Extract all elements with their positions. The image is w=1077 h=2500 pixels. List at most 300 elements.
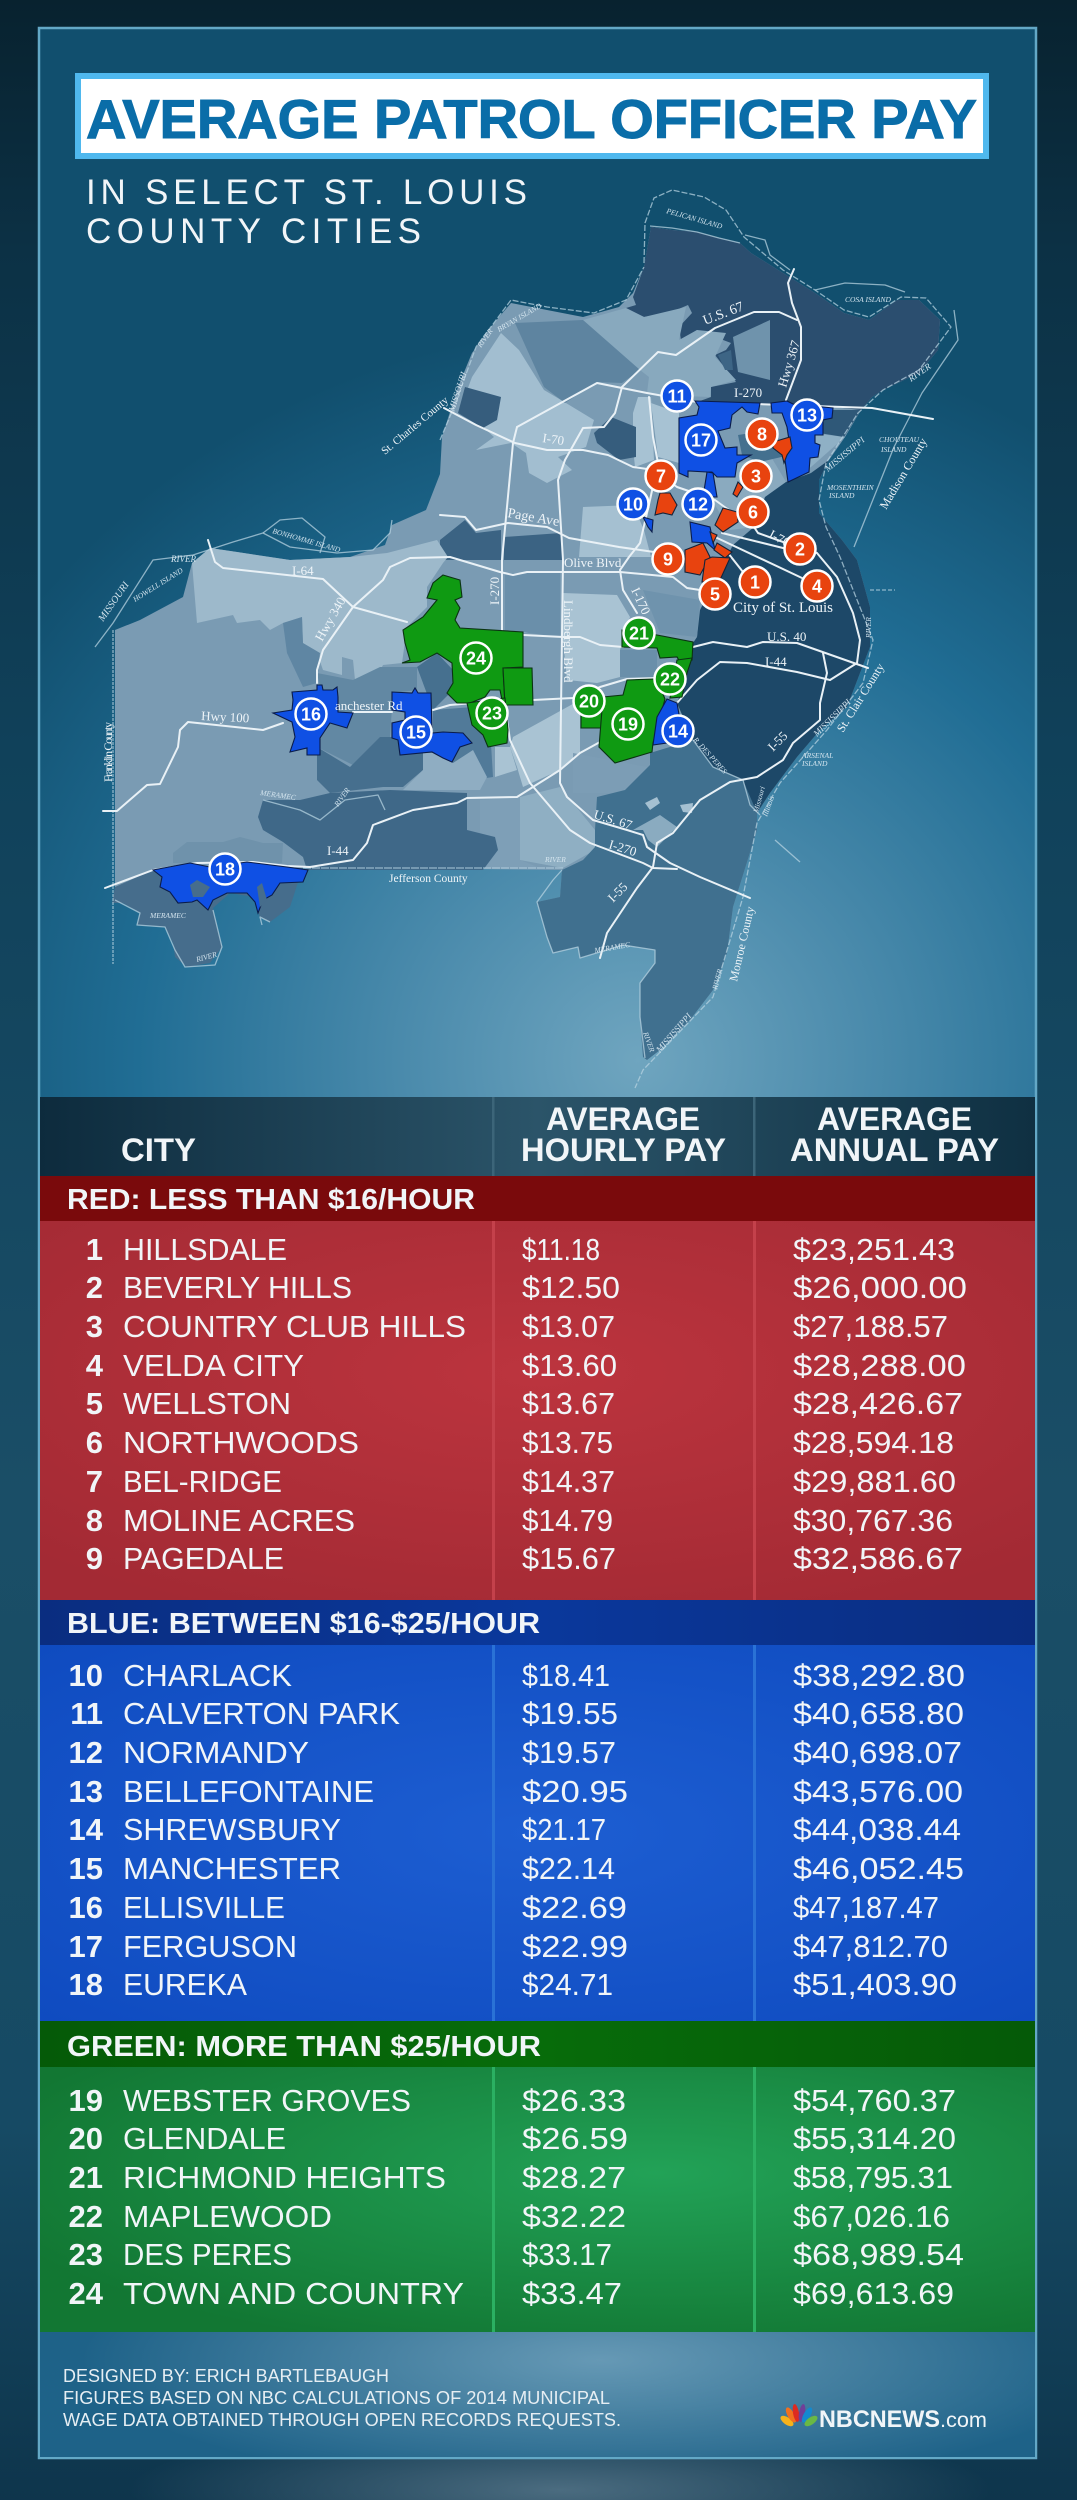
- shade: dark block central: [594, 417, 636, 460]
- shade: northwest light wedge: [461, 333, 594, 483]
- map labels: RIVER: [641, 1030, 657, 1054]
- credits text: FIGURES BASED ON NBC CALCULATIONS OF 2014 MUNICIPAL: [63, 2388, 610, 2408]
- table header row: [40, 1097, 1035, 1176]
- pin: 1: 1: [750, 572, 760, 592]
- map labels: Madison County: [877, 435, 930, 512]
- city: small red area: [710, 532, 717, 543]
- shade: medium block 3: [643, 590, 700, 637]
- pin: 18: 18: [215, 860, 235, 880]
- row 1: [86, 1232, 955, 1267]
- pin: 7: [646, 460, 676, 492]
- shade: west light: [192, 540, 448, 680]
- shade: west darker notch: [283, 617, 320, 687]
- row 4: $28,288.00: [793, 1348, 966, 1383]
- map labels: Hwy 340: [312, 594, 349, 644]
- icon: peacock: [779, 2404, 819, 2428]
- NBC News logo: .com: [940, 2409, 987, 2432]
- shade: city of St. Louis: [677, 460, 870, 813]
- row 7: $14.37: [522, 1464, 615, 1499]
- row 8: MOLINE ACRES: [123, 1503, 355, 1538]
- row 6: [86, 1425, 954, 1460]
- row 11: $40,658.80: [793, 1696, 964, 1731]
- shade: north dark fleck: [718, 350, 733, 370]
- Eureka enclave 2: [257, 883, 267, 907]
- row 12: [69, 1735, 962, 1770]
- green section heading: [40, 2021, 1035, 2067]
- row 16: [69, 1890, 939, 1925]
- row 20: $55,314.20: [793, 2121, 956, 2156]
- row 15: MANCHESTER: [123, 1851, 341, 1886]
- pin: 24: [460, 642, 492, 674]
- row 13: $43,576.00: [793, 1774, 963, 1809]
- row 13: $20.95: [522, 1774, 628, 1809]
- map labels: I-170: [628, 585, 654, 617]
- map labels: Hwy 100: [201, 708, 250, 726]
- pin: 10: [618, 488, 648, 520]
- map labels: MERAMEC: [259, 788, 297, 802]
- map labels: CHOUTEAU: [879, 435, 920, 444]
- table: [40, 1097, 1035, 2332]
- row 17: $22.99: [522, 1929, 628, 1964]
- table header row: AVERAGE: [817, 1101, 972, 1137]
- map labels: MERAMEC: [593, 940, 632, 955]
- city: Des Peres: [467, 698, 508, 747]
- row 19: $26.33: [522, 2083, 626, 2118]
- pin: 23: [476, 698, 508, 728]
- map labels: Franklin County: [101, 722, 115, 782]
- row 4: $13.60: [522, 1348, 617, 1383]
- pin: 15: 15: [406, 722, 426, 742]
- city: Glendale: [581, 708, 603, 728]
- city: Town and Country: [402, 575, 523, 705]
- pin: 17: [686, 424, 716, 456]
- pin: 10: 10: [623, 494, 643, 514]
- map labels: PELICAN ISLAND: [664, 206, 724, 231]
- shade: south east dark: [537, 740, 757, 1060]
- city: Pagedale: [685, 543, 710, 575]
- Eureka enclave 1: [190, 880, 210, 897]
- row 19: 19: [69, 2083, 103, 2118]
- map labels: Monroe County: [726, 905, 757, 983]
- table header row: HOURLY PAY: [521, 1132, 726, 1168]
- map labels: Olive Blvd: [564, 555, 622, 570]
- blue section heading: BLUE: BETWEEN $16-$25/HOUR: [67, 1608, 540, 1640]
- pin: 21: 21: [629, 624, 649, 644]
- row 3: 3: [86, 1309, 103, 1344]
- row 12: $40,698.07: [793, 1735, 962, 1770]
- pin: 16: [296, 698, 326, 730]
- pin: 21: [624, 618, 654, 648]
- row 18: 18: [69, 1967, 103, 2002]
- row 8: [86, 1503, 953, 1538]
- row 23: $68,989.54: [793, 2237, 964, 2272]
- row 17: FERGUSON: [123, 1929, 297, 1964]
- map labels: [96, 206, 933, 1055]
- shade: above Eureka: [173, 837, 283, 863]
- shade: central light south: [510, 700, 580, 787]
- row 2: BEVERLY HILLS: [123, 1270, 352, 1305]
- row 5: WELLSTON: [123, 1386, 291, 1421]
- row 15: $46,052.45: [793, 1851, 964, 1886]
- row 15: [69, 1851, 964, 1886]
- shade: medium dark block 2: [620, 650, 657, 677]
- row 6: 6: [86, 1425, 103, 1460]
- row 13: [69, 1774, 963, 1809]
- row 5: [86, 1386, 963, 1421]
- pin: 14: [662, 716, 694, 746]
- blue section body: [40, 1645, 1035, 2021]
- row 8: 8: [86, 1503, 103, 1538]
- row 17: $47,812.70: [793, 1929, 948, 1964]
- shade: light below Des Peres: [495, 747, 517, 777]
- city: Eureka: [153, 862, 308, 913]
- subtitle: IN SELECT ST. LOUIS: [86, 173, 527, 212]
- map labels: I-270: [607, 837, 638, 859]
- row 2: $26,000.00: [793, 1270, 967, 1305]
- row 14: [69, 1812, 961, 1847]
- blue section heading: [40, 1600, 1035, 1645]
- city: Webster Groves: [599, 679, 665, 763]
- map labels: MISSISSIPPI: [811, 696, 853, 739]
- credits text: [63, 2366, 621, 2430]
- row 9: [86, 1541, 963, 1576]
- row 4: 4: [86, 1348, 104, 1383]
- map labels: Missouri: [751, 785, 767, 814]
- row 10: [69, 1658, 965, 1693]
- row 7: $29,881.60: [793, 1464, 956, 1499]
- city: Richmond Heights: [622, 630, 693, 662]
- subtitle: COUNTY CITIES: [86, 212, 421, 251]
- row 11: $19.55: [522, 1696, 618, 1731]
- row 15: $22.14: [522, 1851, 615, 1886]
- shade: dark strip: [317, 737, 423, 793]
- shade: Meramec band: [258, 790, 498, 870]
- map labels: RIVER: [332, 786, 352, 809]
- shade: east of Manchester: [433, 707, 493, 780]
- city boundaries: [153, 401, 833, 913]
- table header row: AVERAGE: [546, 1101, 700, 1137]
- pin: 13: 13: [797, 406, 817, 426]
- row 12: $19.57: [522, 1735, 616, 1770]
- row 4: VELDA CITY: [123, 1348, 304, 1383]
- row 22: $67,026.16: [793, 2199, 950, 2234]
- map labels: Jefferson County: [389, 873, 468, 885]
- row 13: 13: [69, 1774, 103, 1809]
- pin: 4: [802, 570, 832, 602]
- map labels: anchester Rd: [335, 698, 403, 713]
- row 24: $33.47: [522, 2276, 622, 2311]
- shade: dark block west of I-270: [458, 387, 501, 428]
- map labels: HOWELL ISLAND: [130, 565, 185, 604]
- map labels: I-55: [605, 879, 630, 905]
- map labels: ISLAND: [880, 445, 907, 454]
- shade: dark block page ave west: [440, 520, 501, 560]
- shade: mid dark strip: [515, 320, 640, 403]
- row 3: COUNTRY CLUB HILLS: [123, 1309, 466, 1344]
- map of St. Louis County: [95, 190, 958, 1088]
- row 12: NORMANDY: [123, 1735, 309, 1770]
- row 23: DES PERES: [123, 2237, 292, 2272]
- row 9: $15.67: [522, 1541, 616, 1576]
- shade: light block central: [579, 505, 651, 557]
- row 8: $14.79: [522, 1503, 613, 1538]
- row 2: $12.50: [522, 1270, 620, 1305]
- row 1: $11.18: [522, 1232, 600, 1267]
- map labels: ARSENAL: [801, 751, 833, 760]
- city: Wellston and Hillsdale: [702, 557, 730, 582]
- map labels: RIVER: [710, 968, 724, 991]
- row 9: 9: [86, 1541, 103, 1576]
- city: Shrewsbury: [653, 699, 680, 745]
- city: Ferguson: [679, 401, 760, 477]
- map labels: MISSISSIPPI: [822, 434, 867, 474]
- row 21: $58,795.31: [793, 2160, 953, 2195]
- city: Normandy south: [690, 522, 715, 550]
- row 18: $24.71: [522, 1967, 613, 2002]
- city: Country Club Hills: [733, 482, 743, 497]
- row 20: $26.59: [522, 2121, 628, 2156]
- row 10: $38,292.80: [793, 1658, 965, 1693]
- row 12: 12: [69, 1735, 103, 1770]
- map labels: I-70: [542, 430, 565, 448]
- map labels: COSA ISLAND: [845, 295, 891, 304]
- map labels: I-64: [292, 563, 314, 578]
- row 16: $22.69: [522, 1890, 627, 1925]
- map labels: R. DES PERES: [691, 735, 729, 776]
- map labels: MISSOURI: [96, 580, 132, 625]
- row 5: 5: [86, 1386, 103, 1421]
- pin: 11: 11: [667, 386, 687, 406]
- row 24: $69,613.69: [793, 2276, 954, 2311]
- pin: 12: [682, 488, 714, 520]
- shade: north county mid: [712, 455, 786, 530]
- row 13: BELLEFONTAINE: [123, 1774, 374, 1809]
- row 7: BEL-RIDGE: [123, 1464, 282, 1499]
- footer panel: [40, 2332, 1035, 2457]
- row 15: 15: [69, 1851, 103, 1886]
- row 24: TOWN AND COUNTRY: [123, 2276, 464, 2311]
- map labels: RIVER: [170, 554, 196, 564]
- pin: 9: 9: [663, 550, 673, 570]
- pin: 1: [740, 566, 770, 598]
- county base: [115, 227, 940, 1060]
- credits text: WAGE DATA OBTAINED THROUGH OPEN RECORDS REQUESTS.: [63, 2410, 621, 2430]
- row 6: $13.75: [522, 1425, 613, 1460]
- table header row: CITY: [121, 1132, 196, 1168]
- row 23: [69, 2237, 964, 2272]
- subtitle: [86, 173, 527, 251]
- row 14: 14: [69, 1812, 104, 1847]
- pin: 6: 6: [748, 502, 758, 522]
- row 1: HILLSDALE: [123, 1232, 287, 1267]
- row 2: 2: [86, 1270, 103, 1305]
- pin: 2: 2: [795, 540, 805, 560]
- shade: light block: [510, 617, 535, 633]
- map labels: MOSENTHEIN: [826, 483, 875, 492]
- pin: 13: [792, 400, 822, 430]
- pin: 23: 23: [482, 704, 502, 724]
- row 9: PAGEDALE: [123, 1541, 284, 1576]
- map labels: Illinois: [760, 795, 776, 819]
- row 11: 11: [70, 1696, 103, 1731]
- pin: 5: 5: [710, 584, 720, 604]
- pin: 9: [652, 544, 684, 574]
- row 14: $44,038.44: [793, 1812, 961, 1847]
- shade: medium dark block: [505, 573, 560, 637]
- pin: 8: [746, 418, 778, 450]
- shade: medium near Webster: [573, 753, 647, 793]
- shade: south central: [480, 797, 540, 868]
- green section body: [40, 2067, 1035, 2332]
- shade: pale south of Manchester: [403, 750, 487, 790]
- river outlines: [95, 190, 958, 1088]
- pin: 11: [662, 380, 692, 412]
- city: Bel-Ridge: [655, 493, 677, 515]
- row 23: 23: [69, 2237, 103, 2272]
- row 16: 16: [69, 1890, 103, 1925]
- shade: north light: [583, 307, 736, 397]
- map labels: Hwy 367: [775, 338, 803, 389]
- pin: 24: 24: [466, 648, 486, 668]
- shade: bottom pocket: [112, 867, 303, 967]
- row 8: $30,767.36: [793, 1503, 953, 1538]
- city: Northwoods: [715, 508, 738, 532]
- row 3: $27,188.57: [793, 1309, 948, 1344]
- pin: 17: 17: [691, 430, 711, 450]
- row 24: [69, 2276, 954, 2311]
- map labels: BRYAN ISLAND: [496, 301, 543, 334]
- shade: northeast dark: [819, 410, 861, 437]
- credits text: DESIGNED BY: ERICH BARTLEBAUGH: [63, 2366, 389, 2386]
- row 20: GLENDALE: [123, 2121, 286, 2156]
- map labels: RIVER: [906, 361, 933, 384]
- shade: dark patch: [738, 430, 790, 462]
- pin: 19: [612, 708, 644, 740]
- map labels: BONHOMME ISLAND: [271, 526, 342, 554]
- row 10: 10: [69, 1658, 103, 1693]
- map labels: I-44: [765, 654, 787, 669]
- pin: 16: 16: [301, 704, 321, 724]
- shade: dark above Manchester: [417, 653, 453, 710]
- map labels: I-55: [765, 728, 790, 754]
- shade: pale patch 3: [680, 803, 693, 813]
- row 10: CHARLACK: [123, 1658, 292, 1693]
- map labels: RIVER: [475, 327, 495, 350]
- row 18: [69, 1967, 957, 2002]
- row 5: $13.67: [522, 1386, 615, 1421]
- row 21: [69, 2160, 953, 2195]
- row 6: $28,594.18: [793, 1425, 954, 1460]
- row 17: [69, 1929, 948, 1964]
- city: Manchester: [392, 688, 472, 762]
- row 22: $32.22: [522, 2199, 626, 2234]
- table header row: ANNUAL PAY: [790, 1132, 999, 1168]
- city: Normandy north: [703, 472, 717, 497]
- pin: 4: 4: [812, 576, 822, 596]
- row 18: $51,403.90: [793, 1967, 957, 2002]
- pin: 3: [740, 460, 772, 492]
- title banner: AVERAGE PATROL OFFICER PAY: [86, 88, 977, 150]
- row 20: [69, 2121, 956, 2156]
- row 19: WEBSTER GROVES: [123, 2083, 411, 2118]
- pin: 7: 7: [656, 466, 666, 486]
- city: Beverly Hills and Velda City: [714, 543, 732, 558]
- NBC News logo: NBCNEWS: [819, 2406, 940, 2433]
- row 21: RICHMOND HEIGHTS: [123, 2160, 446, 2195]
- red section heading: [40, 1176, 1035, 1221]
- shade: light column east: [651, 403, 679, 463]
- green section heading: GREEN: MORE THAN $25/HOUR: [67, 2031, 541, 2063]
- map labels: I-270: [487, 577, 502, 605]
- row 21: 21: [69, 2160, 103, 2195]
- map labels: RIVER: [544, 855, 566, 864]
- pin: 18: [210, 854, 240, 884]
- map labels: City of St. Louis: [733, 600, 833, 616]
- row 11: CALVERTON PARK: [123, 1696, 400, 1731]
- pin: 6: [738, 496, 768, 528]
- row 22: MAPLEWOOD: [123, 2199, 332, 2234]
- map labels: RIVER: [194, 950, 218, 964]
- map labels: St. Clair County: [834, 661, 887, 735]
- map labels: RIVER: [864, 617, 873, 639]
- row 23: $33.17: [522, 2237, 612, 2272]
- row 3: $13.07: [522, 1309, 615, 1344]
- city: Moline Acres: [773, 437, 792, 463]
- city: Ellisville: [273, 685, 353, 755]
- row 7: 7: [86, 1464, 103, 1499]
- red section body: [40, 1221, 1035, 1600]
- pin: 20: [574, 686, 604, 716]
- roads: [103, 269, 933, 958]
- map labels: I-70: [767, 526, 793, 550]
- pin: 15: [400, 716, 432, 748]
- city: Charlack: [643, 517, 653, 532]
- row 16: ELLISVILLE: [123, 1890, 285, 1925]
- row 22: 22: [69, 2199, 103, 2234]
- shade: light column: [633, 397, 654, 467]
- map labels: ISLAND: [801, 759, 828, 768]
- map labels: I-44: [327, 843, 349, 858]
- map labels: U.S. 40: [767, 629, 806, 644]
- row 7: [86, 1464, 956, 1499]
- row 2: [86, 1270, 967, 1305]
- map labels: MISSISSIPPI: [653, 1010, 694, 1055]
- shade: pale patch 2: [645, 797, 660, 810]
- row 14: SHREWSBURY: [123, 1812, 341, 1847]
- shade: south central pale: [520, 787, 595, 868]
- pin: 2: [784, 534, 816, 564]
- map labels: U.S. 67: [592, 807, 635, 833]
- row 3: [86, 1309, 948, 1344]
- map labels: MERAMEC: [149, 911, 187, 920]
- shade: mid strip: [317, 667, 417, 767]
- pin: 22: 22: [660, 670, 680, 690]
- row 4: [86, 1348, 966, 1383]
- map labels: Lindbergh Blvd: [561, 600, 576, 683]
- pin: 8: 8: [757, 424, 767, 444]
- row 17: 17: [69, 1929, 103, 1964]
- map labels: U.S. 67: [701, 300, 746, 329]
- pin: 14: 14: [668, 722, 688, 742]
- pin: 12: 12: [688, 494, 708, 514]
- city: Bellefontaine Neighbors: [771, 401, 833, 482]
- row 22: [69, 2199, 950, 2234]
- row 10: $18.41: [522, 1658, 610, 1693]
- row 16: $47,187.47: [793, 1890, 939, 1925]
- row 19: [69, 2083, 956, 2118]
- red section heading: RED: LESS THAN $16/HOUR: [67, 1184, 475, 1216]
- pin: 5: [700, 578, 730, 610]
